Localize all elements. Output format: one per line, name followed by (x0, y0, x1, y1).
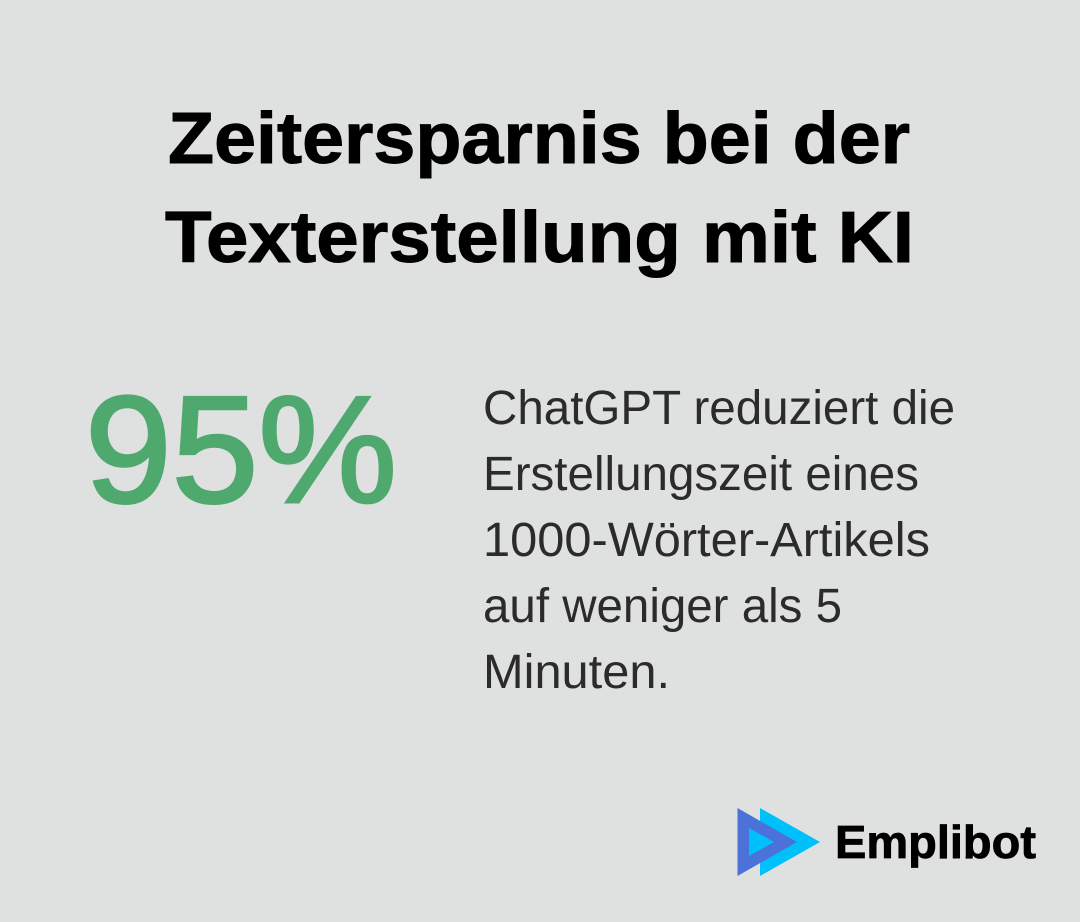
logo: Emplibot (738, 808, 1036, 876)
title: Texterstellung mit KI (165, 198, 914, 278)
description text: auf weniger als 5 (483, 580, 842, 633)
title: Zeitersparnis bei der (168, 99, 910, 179)
title (165, 99, 914, 278)
description text: ChatGPT reduziert die (483, 382, 955, 435)
icon: play triangles (738, 808, 820, 876)
statistic: 95%: 95% (85, 365, 397, 535)
description text (483, 382, 955, 699)
description text: 1000-Wörter-Artikels (483, 514, 930, 567)
description text: Minuten. (483, 646, 670, 699)
description text: Erstellungszeit eines (483, 448, 919, 501)
logo wordmark: Emplibot (835, 816, 1036, 868)
